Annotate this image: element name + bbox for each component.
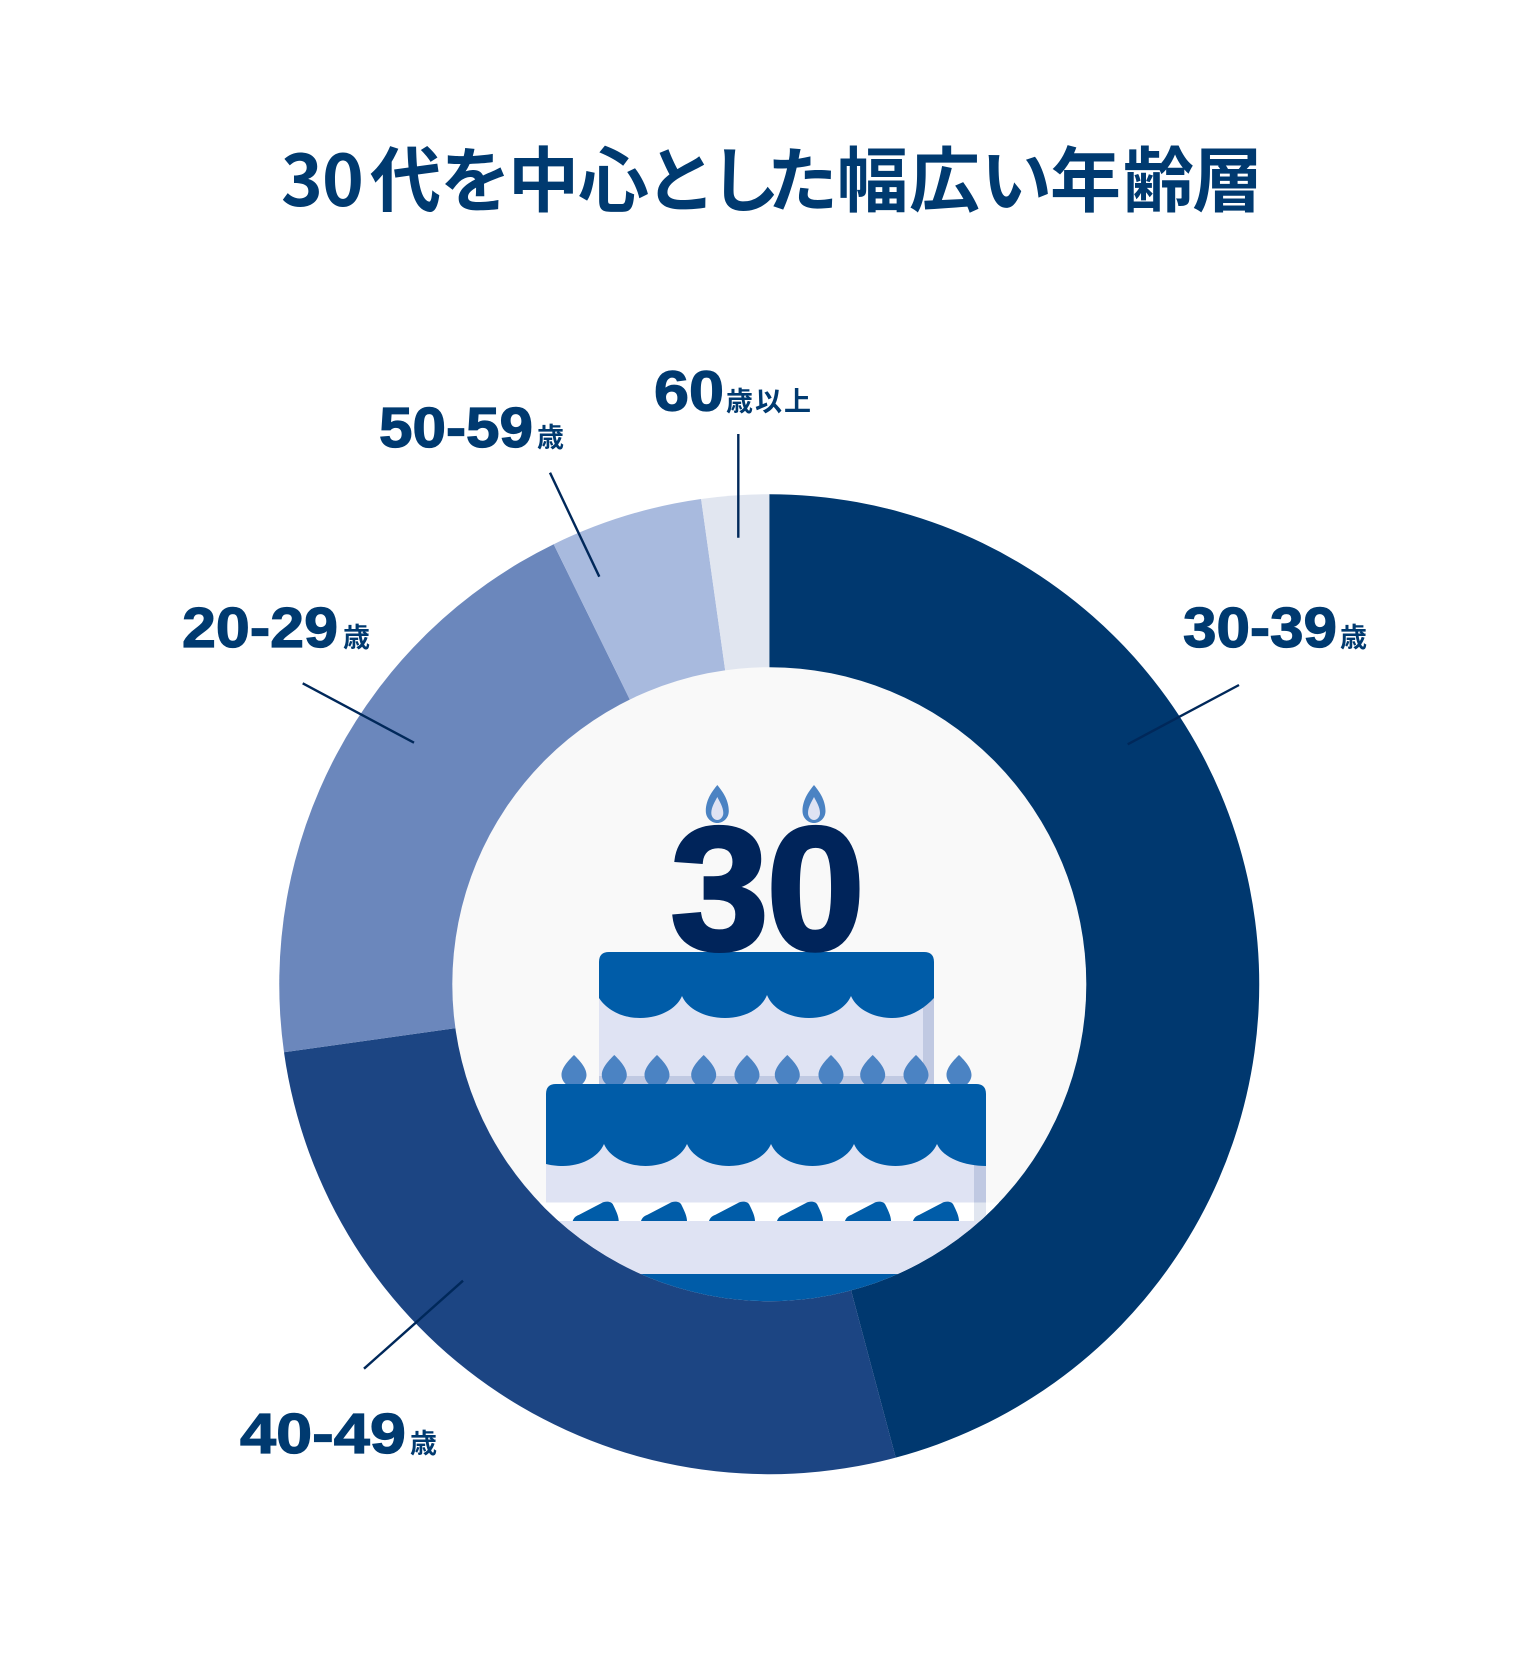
donut chart bbox=[279, 494, 1259, 1474]
top tier icing bbox=[599, 952, 934, 1018]
label: 50-59歳: 歳 bbox=[537, 416, 564, 455]
label: 50-59歳: 50-59 bbox=[379, 396, 533, 460]
infographic canvas bbox=[183, 145, 1366, 1474]
label: 60歳以上: 歳以上 bbox=[726, 380, 811, 419]
leader line: 30-39歳 bbox=[1128, 685, 1239, 744]
label: 40-49歳: 40-49 bbox=[240, 1402, 406, 1466]
leader line: 40-49歳 bbox=[364, 1281, 463, 1369]
leader line: 60歳以上 bbox=[737, 434, 739, 538]
segment: 30-39歳 bbox=[769, 494, 1259, 1458]
top tier body bbox=[599, 990, 934, 1084]
candle number 30: 30 bbox=[670, 792, 865, 987]
lower tier body bbox=[540, 1144, 999, 1302]
label: 40-49歳: 歳 bbox=[410, 1422, 437, 1461]
label: 60歳以上: 60 bbox=[654, 360, 724, 424]
segment: 50-59歳 bbox=[554, 499, 769, 984]
title: 30代を中心とした幅広い年齢層 bbox=[281, 125, 1263, 227]
icon: birthday cake bbox=[440, 785, 1100, 1314]
segment: 40-49歳 bbox=[284, 984, 896, 1474]
candle flames bbox=[706, 785, 826, 823]
sprinkles band bbox=[573, 1202, 959, 1221]
segment: 60歳以上 bbox=[701, 494, 769, 984]
candle drops row bbox=[562, 1055, 972, 1085]
lower tier icing bbox=[546, 1084, 986, 1166]
segment: 20-29歳 bbox=[279, 544, 769, 1052]
label: 20-29歳: 歳 bbox=[343, 616, 370, 655]
label: 60歳以上 bbox=[654, 360, 811, 424]
leader line: 50-59歳 bbox=[550, 473, 599, 577]
label: 30-39歳: 歳 bbox=[1340, 616, 1367, 655]
label: 20-29歳: 20-29 bbox=[182, 596, 338, 660]
leader line: 20-29歳 bbox=[303, 683, 414, 743]
label: 30-39歳: 30-39 bbox=[1183, 596, 1337, 660]
donut centre bbox=[452, 667, 1086, 1301]
